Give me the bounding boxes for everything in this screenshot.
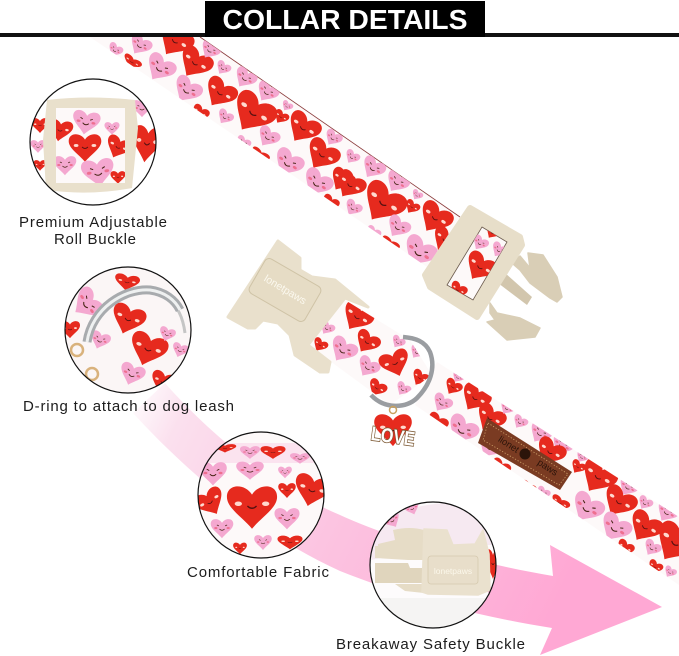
female side-release buckle: lonetpaws [262, 273, 308, 307]
lower collar strap with heart pattern [430, 372, 679, 577]
label: comfortable fabric: Comfortable Fabric [187, 564, 330, 581]
love heart charm [370, 406, 416, 451]
header bar and title [0, 1, 679, 37]
label: D-ring: D-ring to attach to dog leash [23, 398, 234, 415]
circle detail: roll buckle [30, 79, 164, 205]
collar section between buckle and D-ring [314, 302, 428, 395]
circle detail: comfortable fabric [191, 432, 333, 558]
brown leather brand tag [478, 418, 572, 490]
label: breakaway safety buckle: Breakaway Safety Buckle [336, 636, 525, 653]
upper collar strap with heart pattern [110, 36, 460, 263]
circle detail: D-ring [60, 267, 191, 397]
female side-release buckle [228, 241, 368, 372]
circle detail: breakaway safety buckle: lonetpaws [434, 566, 472, 576]
brown leather brand tag: paws [535, 457, 560, 479]
header bar and title: COLLAR DETAILS [222, 4, 468, 35]
love heart charm: LOVE [370, 423, 416, 451]
upper adjustable buckle with prongs [425, 208, 562, 340]
label: roll buckle [19, 214, 167, 248]
pink curved arrow [133, 383, 662, 655]
circle detail: breakaway safety buckle [370, 500, 501, 630]
silver D-ring [371, 337, 432, 406]
brown leather brand tag: lionet [496, 434, 521, 456]
label: roll buckle: Premium Adjustable [19, 214, 167, 231]
label: roll buckle: Roll Buckle [54, 231, 136, 248]
